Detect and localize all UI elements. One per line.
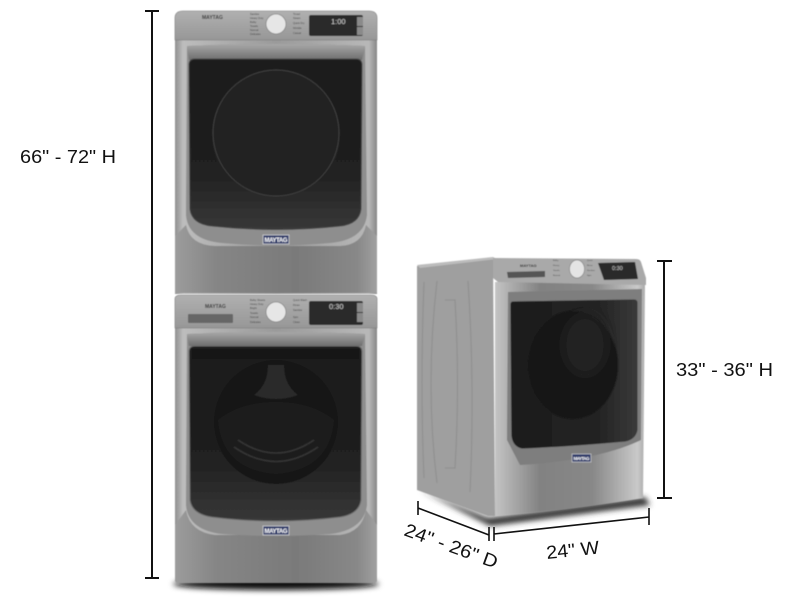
- washer brand name: MAYTAG: [205, 304, 226, 310]
- dryer door shoulder: [187, 44, 365, 60]
- dryer: upper stacked appliance: [175, 11, 377, 294]
- dryer body: [175, 38, 377, 294]
- single washer badge: [572, 454, 591, 462]
- single washer cycle labels: Heavy: [553, 265, 560, 267]
- single washer dial: [570, 260, 584, 278]
- dryer display buttons: [357, 17, 363, 35]
- washer door shoulder: [187, 332, 365, 346]
- washer cycle labels: Bright: [250, 306, 257, 310]
- washer cycle labels: Clean: [293, 320, 300, 324]
- washer display buttons: [357, 303, 363, 322]
- washer body: [175, 325, 377, 583]
- dryer top control panel: [175, 11, 377, 40]
- label: washer height: 33" - 36" H: [676, 359, 773, 380]
- washer badge: MAYTAG: [264, 529, 288, 535]
- washer drum: [214, 360, 338, 484]
- single washer top edge: [417, 257, 497, 268]
- dryer door surround: [186, 44, 367, 246]
- washer door top band: [192, 349, 359, 359]
- washer detergent drawer: [188, 314, 233, 323]
- washer cycle labels: Spin: [293, 315, 299, 319]
- dryer cycle labels: Sanitize: [250, 12, 260, 16]
- washer door glass: [189, 346, 362, 521]
- washer cycle labels: Normal: [250, 315, 259, 319]
- washer door surround: [186, 332, 367, 536]
- dryer cycle labels: Wrinkle: [293, 26, 302, 30]
- washer cycle labels: [250, 298, 307, 324]
- washer cycle labels: Bulky Sheets: [250, 298, 266, 302]
- dryer cycle labels: Steam: [293, 16, 300, 20]
- single washer cycle labels: Sanitize: [587, 269, 596, 272]
- label: depth: 24" - 26" D: [402, 519, 501, 572]
- single washer cycle labels: Quick: [587, 260, 593, 262]
- single washer badge: MAYTAG: [574, 456, 590, 461]
- single washer door surround: [507, 289, 642, 465]
- single washer: angled view: [417, 257, 650, 526]
- single washer cycle labels: Normal: [553, 274, 561, 277]
- single washer brand name: MAYTAG: [520, 263, 537, 268]
- single washer drum: [528, 311, 618, 419]
- washer badge: [263, 526, 289, 535]
- washer cycle labels: Sanitize: [293, 308, 303, 312]
- dryer door glass: [189, 59, 362, 230]
- dimension: stacked height arrow: [145, 11, 159, 578]
- single washer shadow: [420, 490, 650, 526]
- washer display: [309, 301, 363, 325]
- dimension: depth arrow: [418, 501, 489, 541]
- washer cycle labels: Towels: [250, 311, 259, 315]
- single washer cycle labels: Rinse: [587, 265, 593, 267]
- dryer cycle labels: [250, 12, 305, 36]
- dryer dial: [266, 14, 286, 34]
- single washer display readout: 0:30: [612, 266, 623, 272]
- dryer cycle labels: Normal: [250, 28, 259, 32]
- dryer lower shaded front: [175, 225, 377, 293]
- washer top control panel: [175, 295, 377, 328]
- dryer cycle labels: Timed: [293, 12, 301, 16]
- single washer drawer: [507, 271, 545, 278]
- single washer control panel: [493, 258, 646, 285]
- single washer display: [598, 262, 638, 280]
- single washer cycle labels: Bulky: [553, 260, 559, 262]
- washer cycle labels: Heavy Duty: [250, 302, 264, 306]
- single washer side panel: [417, 258, 495, 516]
- dimension: width arrow: [494, 508, 649, 541]
- washer cycle labels: Rinse: [293, 303, 300, 307]
- washer display readout: 0:30: [329, 302, 344, 311]
- dryer display readout: 1:00: [331, 17, 346, 26]
- single washer drum texture: [561, 313, 609, 377]
- washer lower front: [175, 510, 377, 583]
- single washer cycle labels: [553, 260, 596, 277]
- single washer cycle labels: Towels: [553, 270, 561, 272]
- dryer drum outline: [213, 70, 339, 196]
- dryer cycle labels: Towels: [250, 24, 259, 28]
- dryer cycle labels: Quick Dry: [293, 21, 305, 25]
- single washer door glass: [510, 299, 638, 449]
- label: stacked height: 66" - 72" H: [20, 146, 116, 167]
- dryer cycle labels: Bulky: [250, 20, 257, 24]
- washer cycle labels: Delicates: [250, 320, 261, 324]
- dryer cycle labels: Casual: [293, 31, 301, 35]
- washer dial: [266, 302, 286, 322]
- washer: lower stacked appliance: [173, 295, 379, 590]
- dryer brand name: MAYTAG: [202, 15, 223, 21]
- single washer cycle labels: Spin: [587, 275, 592, 277]
- washer cycle labels: Quick Wash: [293, 298, 307, 302]
- dryer badge: MAYTAG: [264, 238, 288, 244]
- dryer badge: [263, 235, 289, 244]
- washer drum interior: [218, 365, 334, 474]
- washer shadow: [173, 578, 379, 590]
- single washer side panel embossing: [422, 281, 472, 492]
- dryer display: [309, 15, 363, 36]
- label: width: 24" W: [545, 536, 601, 563]
- dryer cycle labels: Delicates: [250, 32, 261, 36]
- dimension: washer height arrow: [657, 261, 672, 498]
- dryer cycle labels: Heavy Duty: [250, 16, 264, 20]
- single washer front: [495, 280, 645, 516]
